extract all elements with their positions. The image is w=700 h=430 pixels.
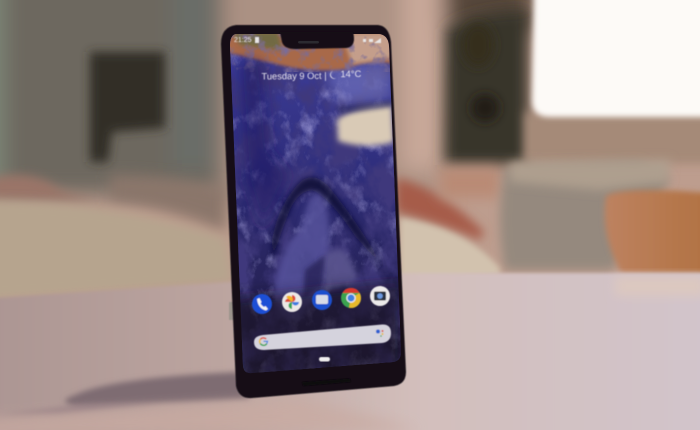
- app icon: photos: [282, 292, 302, 312]
- blurred window: [532, 0, 700, 117]
- central mountain: [275, 192, 330, 320]
- table surface: [0, 273, 700, 430]
- phone side button: [229, 302, 234, 320]
- lock screen date and weather: [261, 69, 362, 82]
- assistant dots: [376, 330, 380, 334]
- home pill: [319, 357, 330, 362]
- lock screen date and weather: Tuesday 9 Oct |: [261, 71, 327, 82]
- white chair left: [0, 201, 232, 300]
- notch speaker: [298, 41, 319, 44]
- bright cloud: [337, 104, 394, 146]
- app icon: chrome: [341, 288, 361, 308]
- pink cushion left: [0, 175, 100, 200]
- status bar time: 21:25: [234, 37, 252, 44]
- dark lower screen fade: [230, 282, 402, 380]
- plant tones: [445, 0, 533, 30]
- notch: [280, 32, 354, 49]
- phone body: [221, 25, 406, 398]
- search bar: [254, 324, 391, 350]
- screen wallpaper: [225, 28, 405, 380]
- app icon: messages: [312, 290, 332, 310]
- left wall: [0, 0, 225, 195]
- lock screen date and weather: 14°C: [340, 69, 362, 79]
- app icon: phone: [252, 294, 272, 314]
- light upper right rock: [325, 60, 392, 106]
- grey seat: [500, 162, 670, 270]
- dark left cleft: [238, 60, 290, 232]
- red chair: [396, 178, 484, 240]
- chair right of phone: [400, 218, 500, 280]
- phone shadow on table: [0, 372, 420, 430]
- google g logo: [260, 338, 268, 345]
- status bar icons: [255, 37, 381, 43]
- phone: [221, 25, 406, 398]
- bottom speaker: [302, 378, 351, 386]
- app icon: camera: [370, 286, 390, 306]
- dark picture on left wall: [90, 52, 165, 162]
- orange lichen top band: [230, 34, 390, 72]
- dark plant: [444, 10, 528, 165]
- dark ravine: [272, 177, 385, 270]
- blurred orange chair: [605, 190, 700, 275]
- wall below window: [525, 112, 700, 164]
